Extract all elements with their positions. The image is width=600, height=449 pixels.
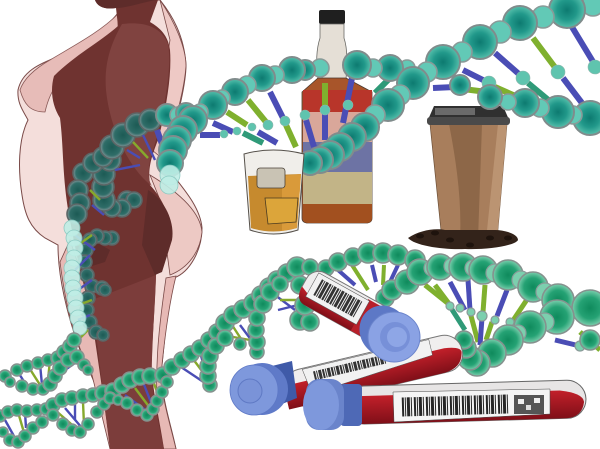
rungs [5,295,300,438]
front strand bottom [455,300,600,376]
back strand and curl over the body [67,103,196,224]
lower-right DNA helix [290,243,600,376]
cap [350,296,420,366]
cup lid [427,106,510,122]
cap [303,379,362,430]
pale outer body outline [18,0,202,449]
pale beads [64,220,87,335]
pink shading layers [20,14,118,112]
second strand [157,51,600,194]
rung nodes [220,60,600,138]
dark torso and leg [52,0,170,449]
front strand [298,0,600,175]
dark bumps [78,229,119,341]
thin rungs [75,235,95,340]
lower leg lighter area [92,275,164,449]
coffee beans [408,229,518,249]
bottle neck [317,24,347,80]
label [302,340,435,395]
under strand [0,276,288,448]
lower-left DNA helix [0,257,307,448]
darker hip shape [142,190,173,275]
blood tube cap: middle tube [230,361,297,415]
barcode label [393,389,550,422]
rung nodes [446,302,585,351]
DNA strands over lower body [64,220,119,341]
blood tube: bottom [303,379,586,430]
whisky bottle [302,10,372,223]
coffee cup [408,106,518,249]
label [306,273,369,325]
blood tube: middle [281,332,466,410]
front strand top [407,253,600,326]
lighter torso panel [106,23,169,186]
bottle label bands [303,90,372,112]
body silhouette [18,0,202,449]
cup body [430,124,507,240]
rungs [90,27,595,215]
whisky glass [244,150,304,234]
upper small strand [0,333,93,395]
blood tube: upper [295,266,420,366]
long main strand [0,257,307,422]
upper DNA helix [67,0,600,224]
QR code [514,395,544,414]
rungs [338,265,600,350]
bottle cap [319,10,345,24]
back strand [290,243,425,331]
